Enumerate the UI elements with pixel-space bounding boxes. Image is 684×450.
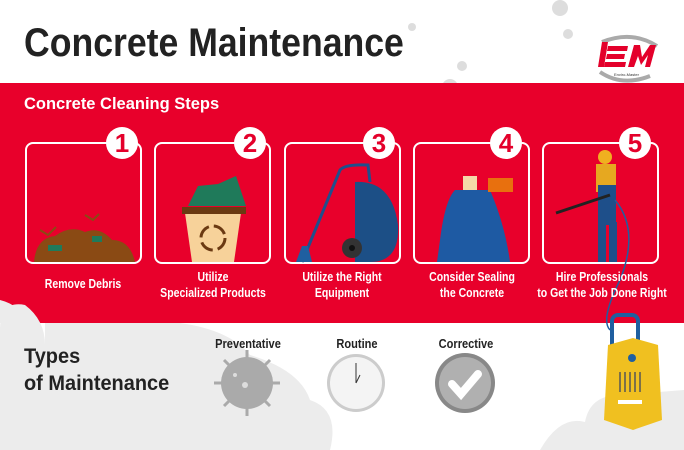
icon: recycle bin <box>182 176 246 262</box>
number 1: 1 <box>115 128 129 158</box>
label: preventative: Preventative <box>215 336 281 351</box>
label 5: Hire Professionals <box>556 270 648 284</box>
icon: virus <box>214 350 280 416</box>
heading: types of maintenance: Types <box>24 345 80 368</box>
label 3: Utilize the Right <box>302 270 382 284</box>
label 2 <box>160 270 266 300</box>
label 3 <box>302 270 382 300</box>
number 2 <box>234 127 266 159</box>
label: routine: Routine <box>336 336 378 351</box>
number 1 <box>106 127 138 159</box>
label 3: Equipment <box>315 286 369 300</box>
number 4 <box>490 127 522 159</box>
icon: debris <box>34 214 135 262</box>
logo: Enviro-Master <box>614 72 640 77</box>
number 4: 4 <box>499 128 513 158</box>
label 1: Remove Debris <box>45 277 121 291</box>
number 5: 5 <box>628 128 642 158</box>
logo <box>598 34 658 83</box>
icon: vacuum <box>296 165 398 262</box>
label: corrective: Corrective <box>439 336 493 351</box>
label 5 <box>537 270 667 300</box>
icon: pressure washer <box>604 315 662 430</box>
card 5 <box>542 142 659 264</box>
icon: worker <box>556 150 629 330</box>
icon: check <box>435 353 495 413</box>
label 5: to Get the Job Done Right <box>537 286 667 300</box>
icon: bag <box>437 176 513 262</box>
card 3 <box>284 142 401 264</box>
heading: types of maintenance: of Maintenance <box>24 372 169 395</box>
card 1 <box>25 142 142 264</box>
number 3 <box>363 127 395 159</box>
number 5 <box>619 127 651 159</box>
card 4 <box>413 142 530 264</box>
number 2: 2 <box>243 128 257 158</box>
label 4: the Concrete <box>440 286 504 300</box>
card 2 <box>154 142 271 264</box>
label 2: Utilize <box>198 270 228 284</box>
number 3: 3 <box>372 128 386 158</box>
heading: types of maintenance <box>24 345 169 395</box>
label 2: Specialized Products <box>160 286 266 300</box>
icon: clock <box>327 354 385 412</box>
heading: cleaning steps: Concrete Cleaning Steps <box>24 94 219 113</box>
label 4: Consider Sealing <box>429 270 515 284</box>
title: Concrete Maintenance <box>24 21 404 65</box>
label 4 <box>429 270 515 300</box>
